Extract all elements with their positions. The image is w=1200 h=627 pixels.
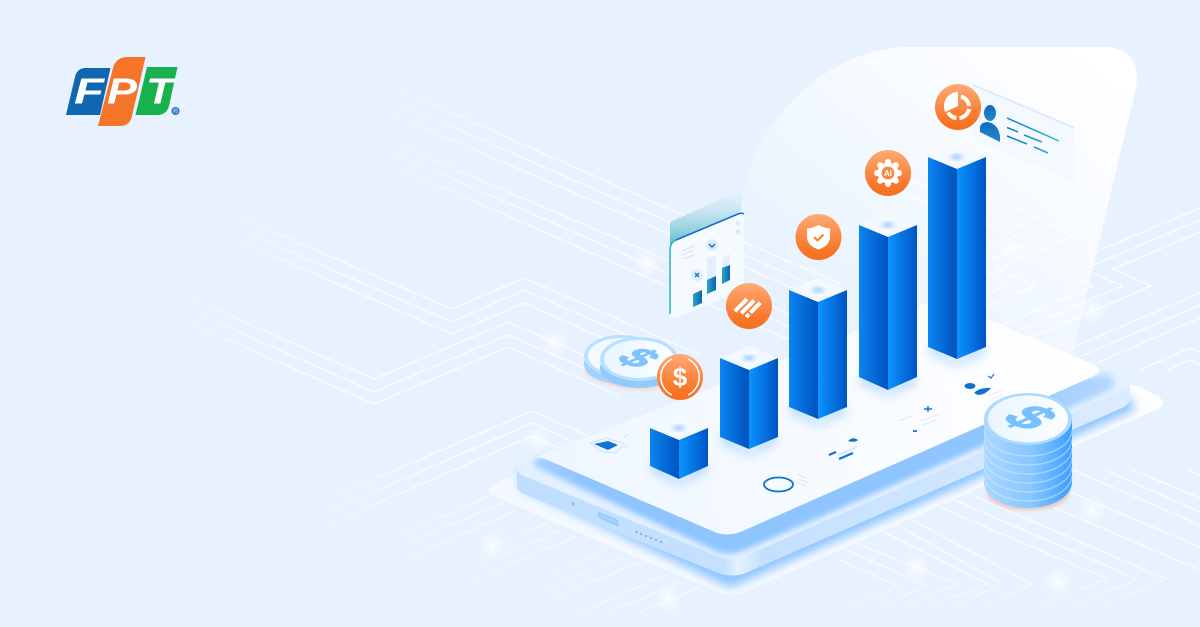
side dot sensor — [572, 502, 574, 506]
device side edge — [517, 384, 1130, 576]
screen small icon: chart — [829, 438, 858, 459]
icon: shield — [796, 214, 842, 260]
device side details — [572, 502, 662, 543]
stack top face — [988, 396, 1068, 442]
bar 4 — [859, 213, 917, 390]
profile card edges — [973, 85, 1075, 128]
logo letters — [74, 70, 177, 112]
dashboard floating card — [670, 190, 744, 318]
stack body — [984, 418, 1072, 508]
icon: AI gear: AI — [884, 169, 892, 178]
icon: pie chart — [935, 84, 981, 130]
icon: dollar — [657, 354, 703, 400]
card mini bars — [693, 265, 730, 307]
bar 2 — [720, 346, 778, 449]
card dots — [736, 220, 740, 234]
speaker dots — [635, 531, 662, 543]
icon: dollar: $ — [673, 362, 688, 392]
device glow shadow — [520, 395, 1135, 588]
logo letters: P — [107, 70, 138, 112]
profile text lines — [1007, 118, 1059, 153]
card edges — [670, 240, 676, 314]
screen small icon: user — [964, 374, 1003, 399]
back coin — [584, 335, 658, 385]
card cross badge — [691, 269, 703, 281]
stack dollar sign: $ — [988, 398, 1074, 436]
card teal light beam — [670, 190, 741, 245]
glowing light dots — [477, 236, 1108, 615]
charging port — [598, 513, 618, 526]
stack top rim — [984, 393, 1072, 445]
base plate under device — [488, 385, 1163, 595]
screen small icon: ring — [764, 475, 809, 492]
coin stack — [984, 393, 1074, 510]
device top surface — [517, 298, 1129, 559]
card bar tracks — [707, 254, 730, 289]
bar 3 — [789, 278, 847, 419]
profile card body — [973, 85, 1075, 182]
card text lines — [682, 246, 694, 259]
translucent backdrop panel — [740, 47, 1137, 372]
screen small icon: tool — [898, 406, 940, 431]
bar 5 — [928, 145, 986, 359]
device screen sheet — [526, 298, 1099, 534]
card body — [670, 214, 744, 318]
logo blue tile — [66, 68, 110, 115]
coin pair — [584, 335, 678, 390]
logo letters: F — [74, 70, 105, 112]
icon: layers lines — [726, 283, 772, 329]
icon: AI gear — [865, 150, 911, 196]
stack rings — [984, 430, 1072, 501]
bar 1 — [650, 416, 708, 479]
front coin dollar sign: $ — [605, 343, 672, 373]
logo green tile — [136, 67, 178, 115]
screen small icon: map — [590, 434, 630, 453]
profile floating card — [973, 85, 1075, 182]
registered mark: ® — [173, 108, 179, 116]
device screen groove — [534, 374, 1114, 554]
card check badge — [706, 239, 718, 251]
bar shadows — [650, 344, 986, 486]
logo: FPT — [66, 57, 180, 126]
profile person icon — [980, 105, 1000, 142]
logo letters: T — [146, 70, 177, 112]
stack shadow — [987, 474, 1069, 510]
background circuit lines — [145, 90, 1200, 627]
logo orange tile — [98, 57, 146, 126]
